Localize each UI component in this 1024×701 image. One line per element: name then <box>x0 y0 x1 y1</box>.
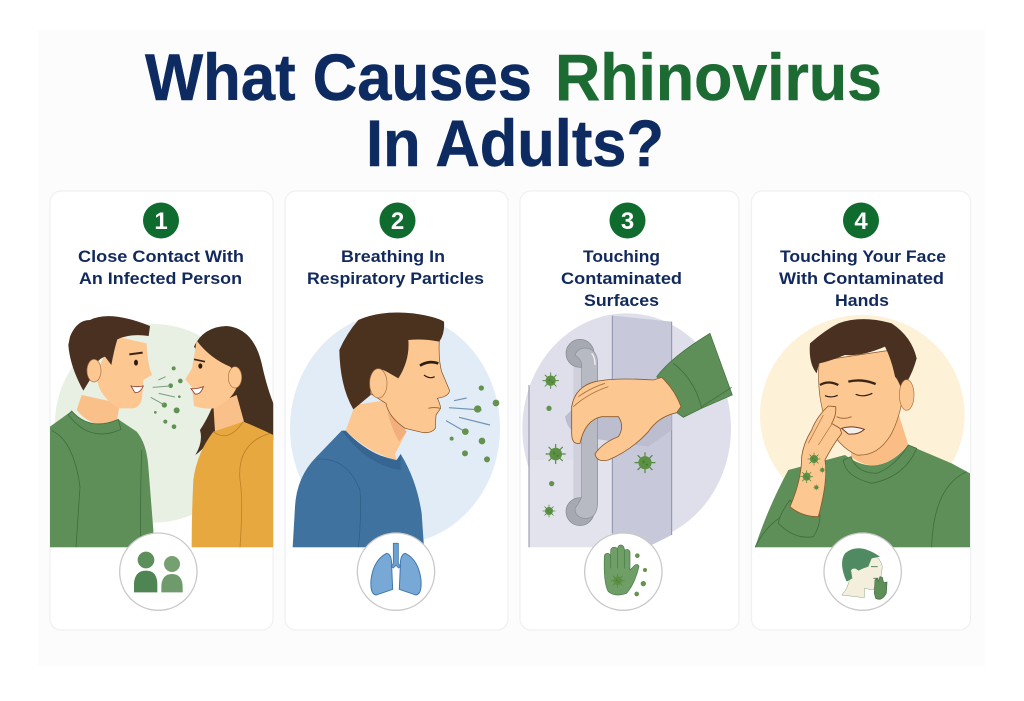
heading: close contact: Close Contact With <box>78 247 244 266</box>
heading: surfaces: Contaminated <box>561 269 682 288</box>
number badge 1 <box>143 202 179 238</box>
title: Rhinovirus <box>555 40 882 114</box>
number badge 2: 2 <box>391 208 404 235</box>
number badge 3 <box>610 202 646 238</box>
droplets <box>154 366 183 429</box>
illustration: two people talking <box>50 316 273 547</box>
heading: close contact <box>78 247 244 288</box>
illustration: man touching face <box>755 315 970 547</box>
number badge 4 <box>843 202 879 238</box>
illustration: hand on door handle <box>522 313 732 547</box>
heading: breathing in: Respiratory Particles <box>307 269 484 288</box>
icon: face with hand <box>824 533 901 610</box>
woman <box>194 326 273 455</box>
heading: surfaces: Touching <box>583 247 660 266</box>
heading: close contact: An Infected Person <box>79 269 242 288</box>
title: In Adults? <box>366 106 664 180</box>
number badge 1: 1 <box>154 208 168 235</box>
heading: breathing in <box>307 247 484 288</box>
heading: touching face: Touching Your Face <box>780 247 946 266</box>
panel: close contact <box>50 191 273 630</box>
title: What Causes <box>145 40 532 114</box>
man <box>50 411 153 547</box>
heading: surfaces <box>561 247 682 310</box>
title <box>145 40 882 180</box>
number badge 2 <box>380 202 416 238</box>
number badge 4: 4 <box>854 208 868 235</box>
panel: surfaces <box>520 191 739 630</box>
heading: touching face: Hands <box>835 291 889 310</box>
particles <box>446 398 490 432</box>
heading: surfaces: Surfaces <box>584 291 659 310</box>
number badge 3: 3 <box>621 208 634 235</box>
heading: touching face: With Contaminated <box>779 269 944 288</box>
icon: two people <box>120 533 197 610</box>
illustration: man breathing particles <box>290 312 500 547</box>
icon: contaminated hand <box>585 533 662 610</box>
panel: touching face <box>752 191 970 630</box>
heading: breathing in: Breathing In <box>341 247 445 266</box>
heading: touching face <box>779 247 946 310</box>
icon: lungs <box>357 533 435 610</box>
panel: breathing <box>285 191 508 630</box>
